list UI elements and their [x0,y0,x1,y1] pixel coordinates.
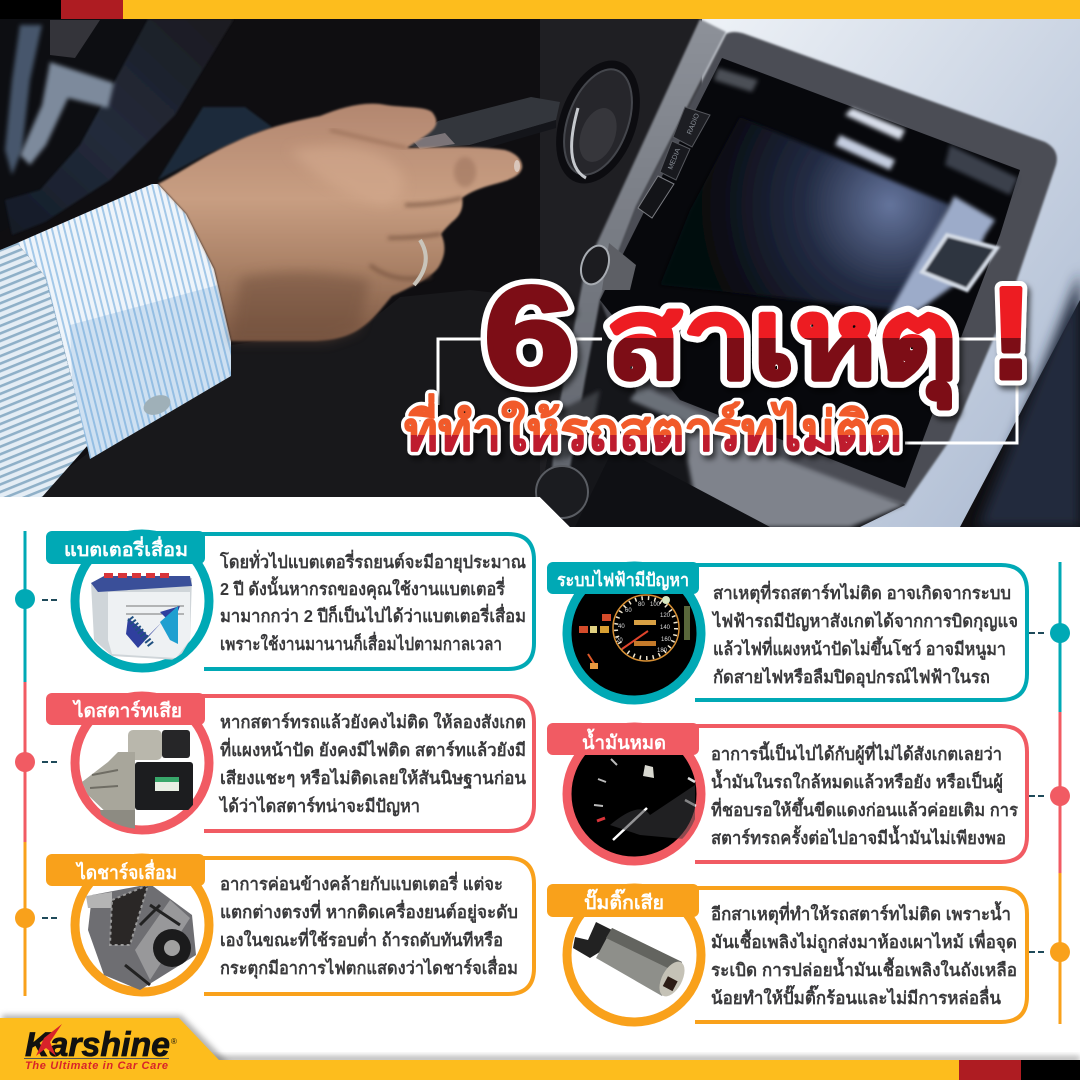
photo: sleeve [0,243,88,505]
panel: out of fuel [547,723,1027,862]
photo: dark lap area [30,290,560,497]
photo: radio buttons: MEDIA [667,147,682,171]
logo: Karshine: The Ultimate in Car Care [25,1060,168,1072]
photo: hand turning car key at dashboard [0,19,1080,529]
icon: fuel pump [567,888,701,1022]
photo: steering wheel [0,19,272,235]
photo: shirt cuff [17,184,231,459]
photo: lower console [536,385,905,527]
label: faulty fuel pump: ปั๊มติ๊กเสีย [584,888,664,914]
text block: faulty fuel pump [711,901,1017,1008]
label: out of fuel: น้ำมันหมด [582,728,666,754]
icon: instrument cluster: 120 [660,613,671,619]
icon: instrument cluster: 180 [657,648,668,654]
title: causes word: สาเหตุ [606,277,958,410]
label: faulty alternator [46,854,205,886]
text block: electrical problem: สาเหตุที่รถสตาร์ทไม่ติด อาจเกิดจากระบบ [713,580,1011,604]
photo: key fob [408,97,560,150]
text block: dead battery: 2 ปี ดังนั้นหากรถของคุณใช้งานแบตเตอรี่ [220,576,506,600]
photo: hand [158,104,522,341]
icon: instrument cluster [567,566,701,700]
panel: faulty alternator [46,854,534,994]
icon: fuel gauge [567,727,701,861]
text block: faulty alternator: อาการค่อนข้างคล้ายกับแบตเตอรี่ แต่จะ [220,871,503,894]
text block: dead battery [219,549,526,654]
text block: faulty starter: ได้ว่าไดสตาร์ทน่าจะมีปัญหา [218,795,420,817]
icon: starter motor [75,696,209,835]
text block: out of fuel: อาการนี้เป็นไปได้กับผู้ที่ไม่ได้สังเกตเลยว่า [711,741,1002,766]
icon: instrument cluster: 100 [650,602,661,608]
label: faulty fuel pump [547,884,699,917]
photo: radio buttons: RADIO [686,112,701,136]
subtitle: ที่ทำให้รถสตาร์ทไม่ติด [404,393,902,462]
logo: Karshine: ® [171,1037,177,1046]
logo: Karshine: Karshine [25,1026,170,1064]
icon: instrument cluster: 60 [625,608,632,614]
text block: faulty starter [218,711,526,817]
photo: top right light dashboard [700,19,1080,527]
icon: battery [75,534,209,668]
text block: faulty fuel pump: มันเชื้อเพลิงไม่ถูกส่งมาห้องเผาไหม้ เพื่อจุด [711,929,1017,954]
text block: faulty starter: เสียงแชะๆ หรือไม่ติดเลยให้สันนิษฐานก่อน [220,767,526,790]
text block: dead battery: มามากกว่า 2 ปีก็เป็นไปได้ว่าแบตเตอรี่เสื่อม [220,603,526,626]
photo: power knob [576,242,636,290]
photo: top glossy details [714,68,1018,195]
title: number 6: 6 [484,259,574,413]
title frame lines [438,339,1017,443]
title: exclamation mark: ! [990,260,1032,406]
text block: out of fuel: ที่ชอบรอให้ขึ้นขีดแดงก่อนแล้วค่อยเติม การ [711,797,1019,820]
text block: electrical problem: ไฟฟ้ารถมีปัญหาสังเกตได้จากการบิดกุญแจ [711,610,1018,632]
label: out of fuel [547,723,699,755]
icon: instrument cluster: 40 [618,624,625,630]
panel: faulty starter [46,693,534,835]
icon: instrument cluster: 20 [616,638,623,644]
label: faulty starter [46,693,205,725]
subtitle: ที่ทำให้รถสตาร์ทไม่ติด [404,393,902,462]
text block: out of fuel: สตาร์ทรถครั้งต่อไปอาจมีน้ำมันไม่เพียงพอ [711,825,1006,848]
text block: faulty alternator: เองในขณะที่ใช้รอบต่ำ ถ้ารถดับทันทีหรือ [220,927,503,950]
label: faulty alternator: ไดชาร์จเสื่อม [75,859,177,884]
text block: dead battery: โดยทั่วไปแบตเตอรี่รถยนต์จะมีอายุประมาณ [219,549,526,573]
title: number 6: 6 [484,259,574,413]
photo: lower centre dark backing [540,306,905,527]
text block: electrical problem [711,580,1018,688]
text block: faulty fuel pump: น้อยทำให้ปั๊มติ๊กร้อนและไม่มีการหล่อลื่น [711,984,1001,1008]
panel: electrical problem [547,562,1027,700]
panel: faulty fuel pump [547,884,1027,1022]
icon: instrument cluster: 160 [661,637,672,643]
label: electrical problem: ระบบไฟฟ้ามีปัญหา [557,569,689,591]
icon: alternator [75,858,209,992]
text block: out of fuel: น้ำมันในรถใกล้หมดแล้วหรือยัง หรือเป็นผู้ [711,769,1003,794]
footer bar [0,1015,1080,1080]
text block: faulty starter: หากสตาร์ทรถแล้วยังคงไม่ติด ให้ลองสังเกต [220,711,526,732]
top colour bar [0,0,1080,19]
panel: dead battery [46,531,534,669]
icon: instrument cluster: 140 [660,625,671,631]
title: causes word: สาเหตุ [606,277,958,410]
label: faulty starter: ไดสตาร์ทเสีย [72,699,182,722]
text block: faulty fuel pump: ระเบิด การปล่อยน้ำมันเชื้อเพลิงในถังเหลือ [711,957,1017,980]
photo: ignition ring [556,60,640,184]
title block [404,259,1032,462]
label: dead battery: แบตเตอรี่เสื่อม [64,536,188,561]
text block: out of fuel [711,741,1019,848]
right timeline [1029,562,1070,1024]
photo: radio buttons [638,107,710,218]
text block: electrical problem: แล้วไฟที่แผงหน้าปัดไม่ขึ้นโชว์ อาจมีหนูมา [713,636,1006,661]
photo: bezel [600,32,1057,505]
text block: faulty fuel pump: อีกสาเหตุที่ทำให้รถสตาร์ทไม่ติด เพราะน้ำ [711,901,1011,925]
photo: silver trim [550,19,727,468]
text block: faulty starter: ที่แผงหน้าปัด ยังคงมีไฟติด สตาร์ทแล้วยังมี [220,737,526,760]
photo: lower right dark dash [978,272,1080,527]
photo: black glass panel [600,58,1020,488]
photo: dashboard dark panel [540,19,702,497]
text block: dead battery: เพราะใช้งานมานานก็เสื่อมไปตามกาลเวลา [220,631,502,654]
title: exclamation mark: ! [990,260,1032,406]
left timeline [15,531,57,996]
label: dead battery [46,531,205,564]
label: electrical problem [547,562,699,594]
text block: faulty alternator: แตกต่างตรงที่ หากติดเครื่องยนต์อยู่จะดับ [220,899,518,924]
photo: light frame around screen [885,196,995,320]
text block: electrical problem: กัดสายไฟหรือลืมปิดอุปกรณ์ไฟฟ้าในรถ [713,666,990,688]
photo: infotainment screen [710,120,950,310]
text block: faulty alternator [220,871,518,979]
photo: side vent [922,235,997,290]
text block: faulty alternator: กระตุกมีอาการไฟตกแสดงว่าไดชาร์จเสื่อม [220,955,518,979]
icon: instrument cluster: 80 [638,602,645,608]
